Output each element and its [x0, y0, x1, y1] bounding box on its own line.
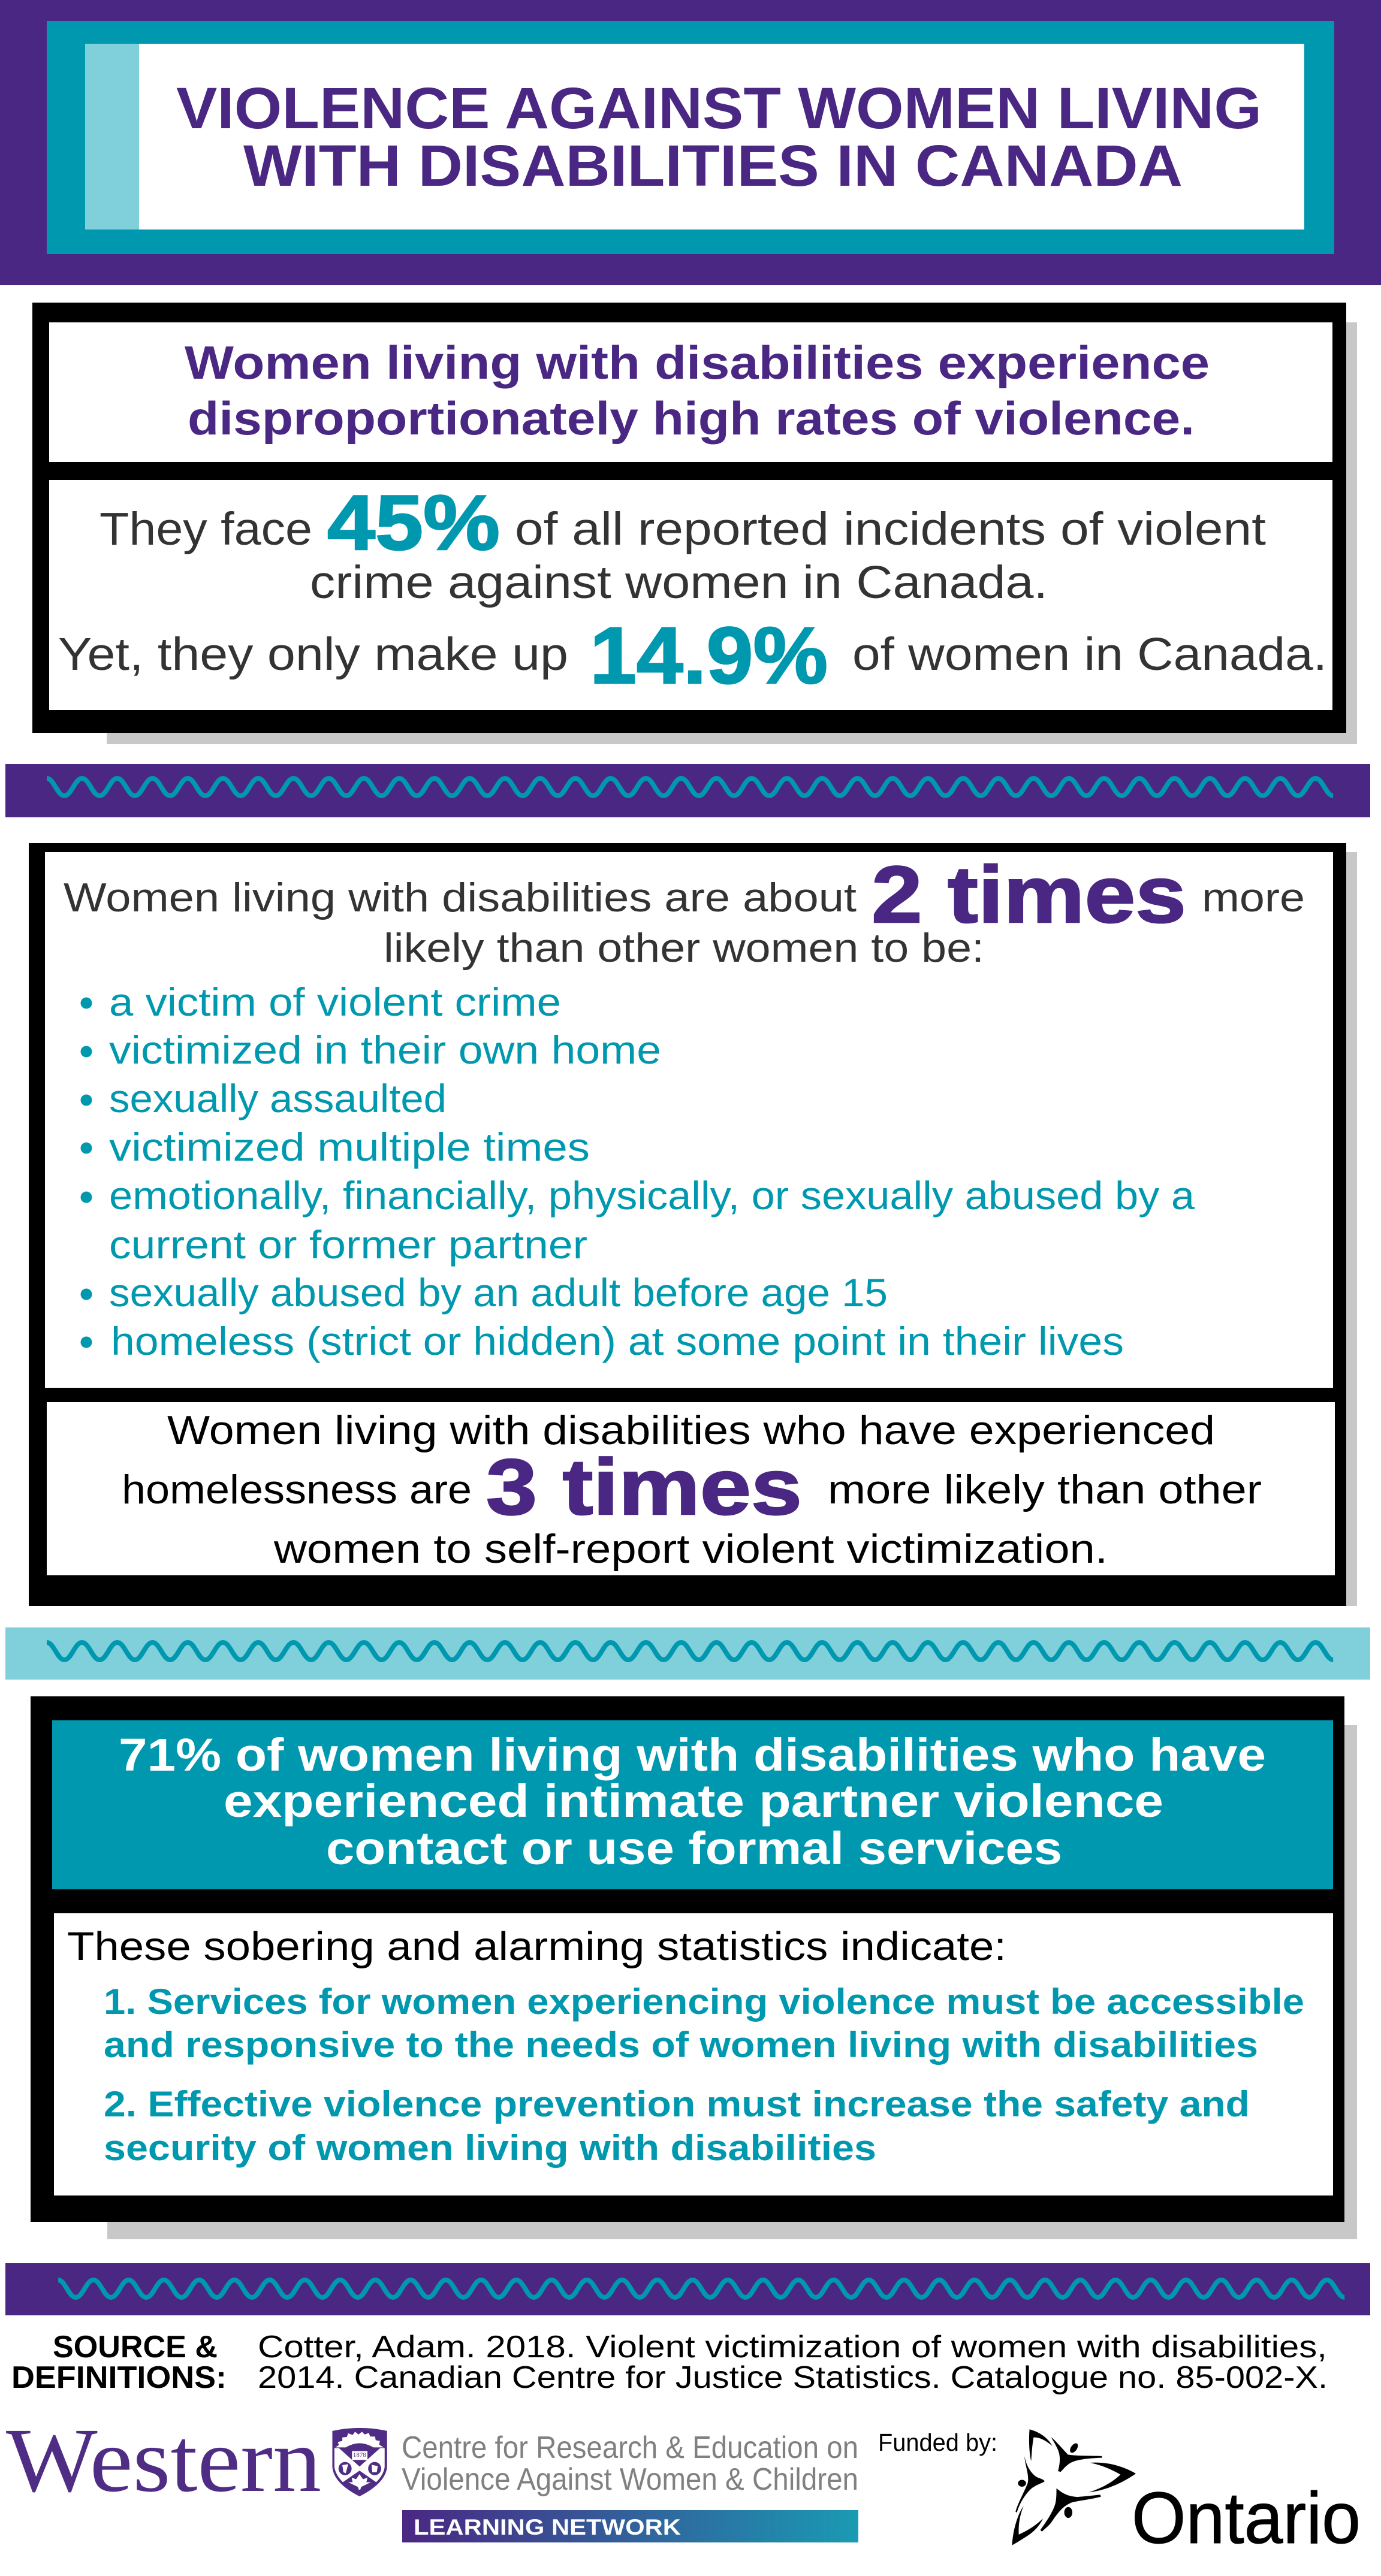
title: WITH DISABILITIES IN CANADA [243, 133, 1183, 198]
Learning Network badge [402, 2510, 858, 2542]
statistics text box: 14.9% [590, 611, 828, 700]
three times callout box [47, 1402, 1335, 1575]
Ontario logo [1012, 2429, 1361, 2559]
source and definitions: DEFINITIONS: [11, 2360, 227, 2395]
conclusions box: These sobering and alarming statistics indicate: [67, 1924, 1006, 1969]
funded by label: Funded by: [878, 2429, 997, 2456]
statistics text box [49, 479, 1332, 710]
statistics text box: 45% [327, 479, 500, 566]
source and definitions: Cotter, Adam. 2018. Violent victimization of women with disabilities, [258, 2330, 1327, 2364]
Centre for Research and Education logo text [402, 2430, 858, 2497]
three times callout box: homelessness are [122, 1467, 472, 1512]
Centre for Research and Education logo text: Centre for Research & Education on [402, 2430, 858, 2465]
two times list box: Women living with disabilities are about [64, 875, 857, 920]
three times callout box: more likely than other [828, 1467, 1262, 1512]
two times list box: likely than other women to be: [384, 925, 984, 971]
panel heading box: disproportionately high rates of violence. [188, 392, 1195, 445]
header banner [0, 0, 1381, 285]
title [176, 76, 1262, 198]
statistics text box: of all reported incidents of violent [515, 503, 1266, 555]
Western University logo: Western [6, 2410, 321, 2511]
two times list box [45, 850, 1333, 1388]
conclusions box: 1. Services for women experiencing violence must be accessible [104, 1982, 1304, 2022]
Centre for Research and Education logo text: Violence Against Women & Children [402, 2462, 858, 2497]
bullet list: victimized multiple times [109, 1125, 590, 1169]
panel: formal services and implications [31, 1696, 1357, 2239]
bullet list: emotionally, financially, physically, or sexually abused by a [109, 1173, 1195, 1218]
seventy-one percent statistic box: 71% of women living with disabilities who have [119, 1729, 1266, 1781]
conclusions box: and responsive to the needs of women living with disabilities [104, 2025, 1258, 2065]
source and definitions: SOURCE & [53, 2330, 218, 2364]
wave divider: purple [5, 764, 1370, 817]
bullet list: sexually abused by an adult before age 15 [109, 1270, 888, 1315]
wave divider: light teal [5, 1627, 1370, 1680]
conclusions box: security of women living with disabilities [104, 2128, 876, 2168]
panel heading box [49, 322, 1332, 462]
bullet list: a victim of violent crime [109, 980, 561, 1024]
two times list box: 2 times [872, 850, 1186, 940]
wave divider: purple footer [5, 2263, 1370, 2315]
icon: Ontario trillium [1012, 2429, 1136, 2545]
bullet list [80, 980, 1195, 1363]
panel: disproportionate rates [32, 303, 1357, 744]
icon: Western shield crest: 1878 [353, 2451, 366, 2458]
seventy-one percent statistic box: experienced intimate partner violence [224, 1775, 1163, 1827]
conclusions box [54, 1913, 1333, 2196]
source and definitions: 2014. Canadian Centre for Justice Statistics. Catalogue no. 85-002-X. [258, 2360, 1328, 2395]
Learning Network badge: LEARNING NETWORK [414, 2515, 681, 2539]
panel: two times more likely [29, 843, 1357, 1606]
three times callout box: women to self-report violent victimization. [273, 1526, 1108, 1572]
bullet list: sexually assaulted [109, 1076, 447, 1121]
seventy-one percent statistic box [52, 1720, 1333, 1889]
three times callout box: Women living with disabilities who have experienced [167, 1408, 1215, 1453]
bullet list: homeless (strict or hidden) at some point in their lives [111, 1319, 1124, 1363]
statistics text box: They face [99, 503, 312, 555]
two times list box: more [1202, 875, 1305, 920]
seventy-one percent statistic box: contact or use formal services [326, 1823, 1062, 1874]
conclusions box: 2. Effective violence prevention must increase the safety and [104, 2084, 1250, 2124]
panel heading box: Women living with disabilities experience [185, 336, 1210, 389]
three times callout box: 3 times [486, 1443, 802, 1531]
statistics text box: of women in Canada. [852, 629, 1327, 680]
bullet list: current or former partner [109, 1222, 587, 1267]
statistics text box: crime against women in Canada. [310, 557, 1048, 608]
Ontario wordmark: Ontario [1132, 2477, 1361, 2559]
icon: Western shield crest [332, 2428, 387, 2496]
bullet list: victimized in their own home [109, 1028, 661, 1072]
statistics text box: Yet, they only make up [58, 629, 568, 680]
source and definitions [11, 2330, 1328, 2395]
title: VIOLENCE AGAINST WOMEN LIVING [176, 76, 1262, 141]
